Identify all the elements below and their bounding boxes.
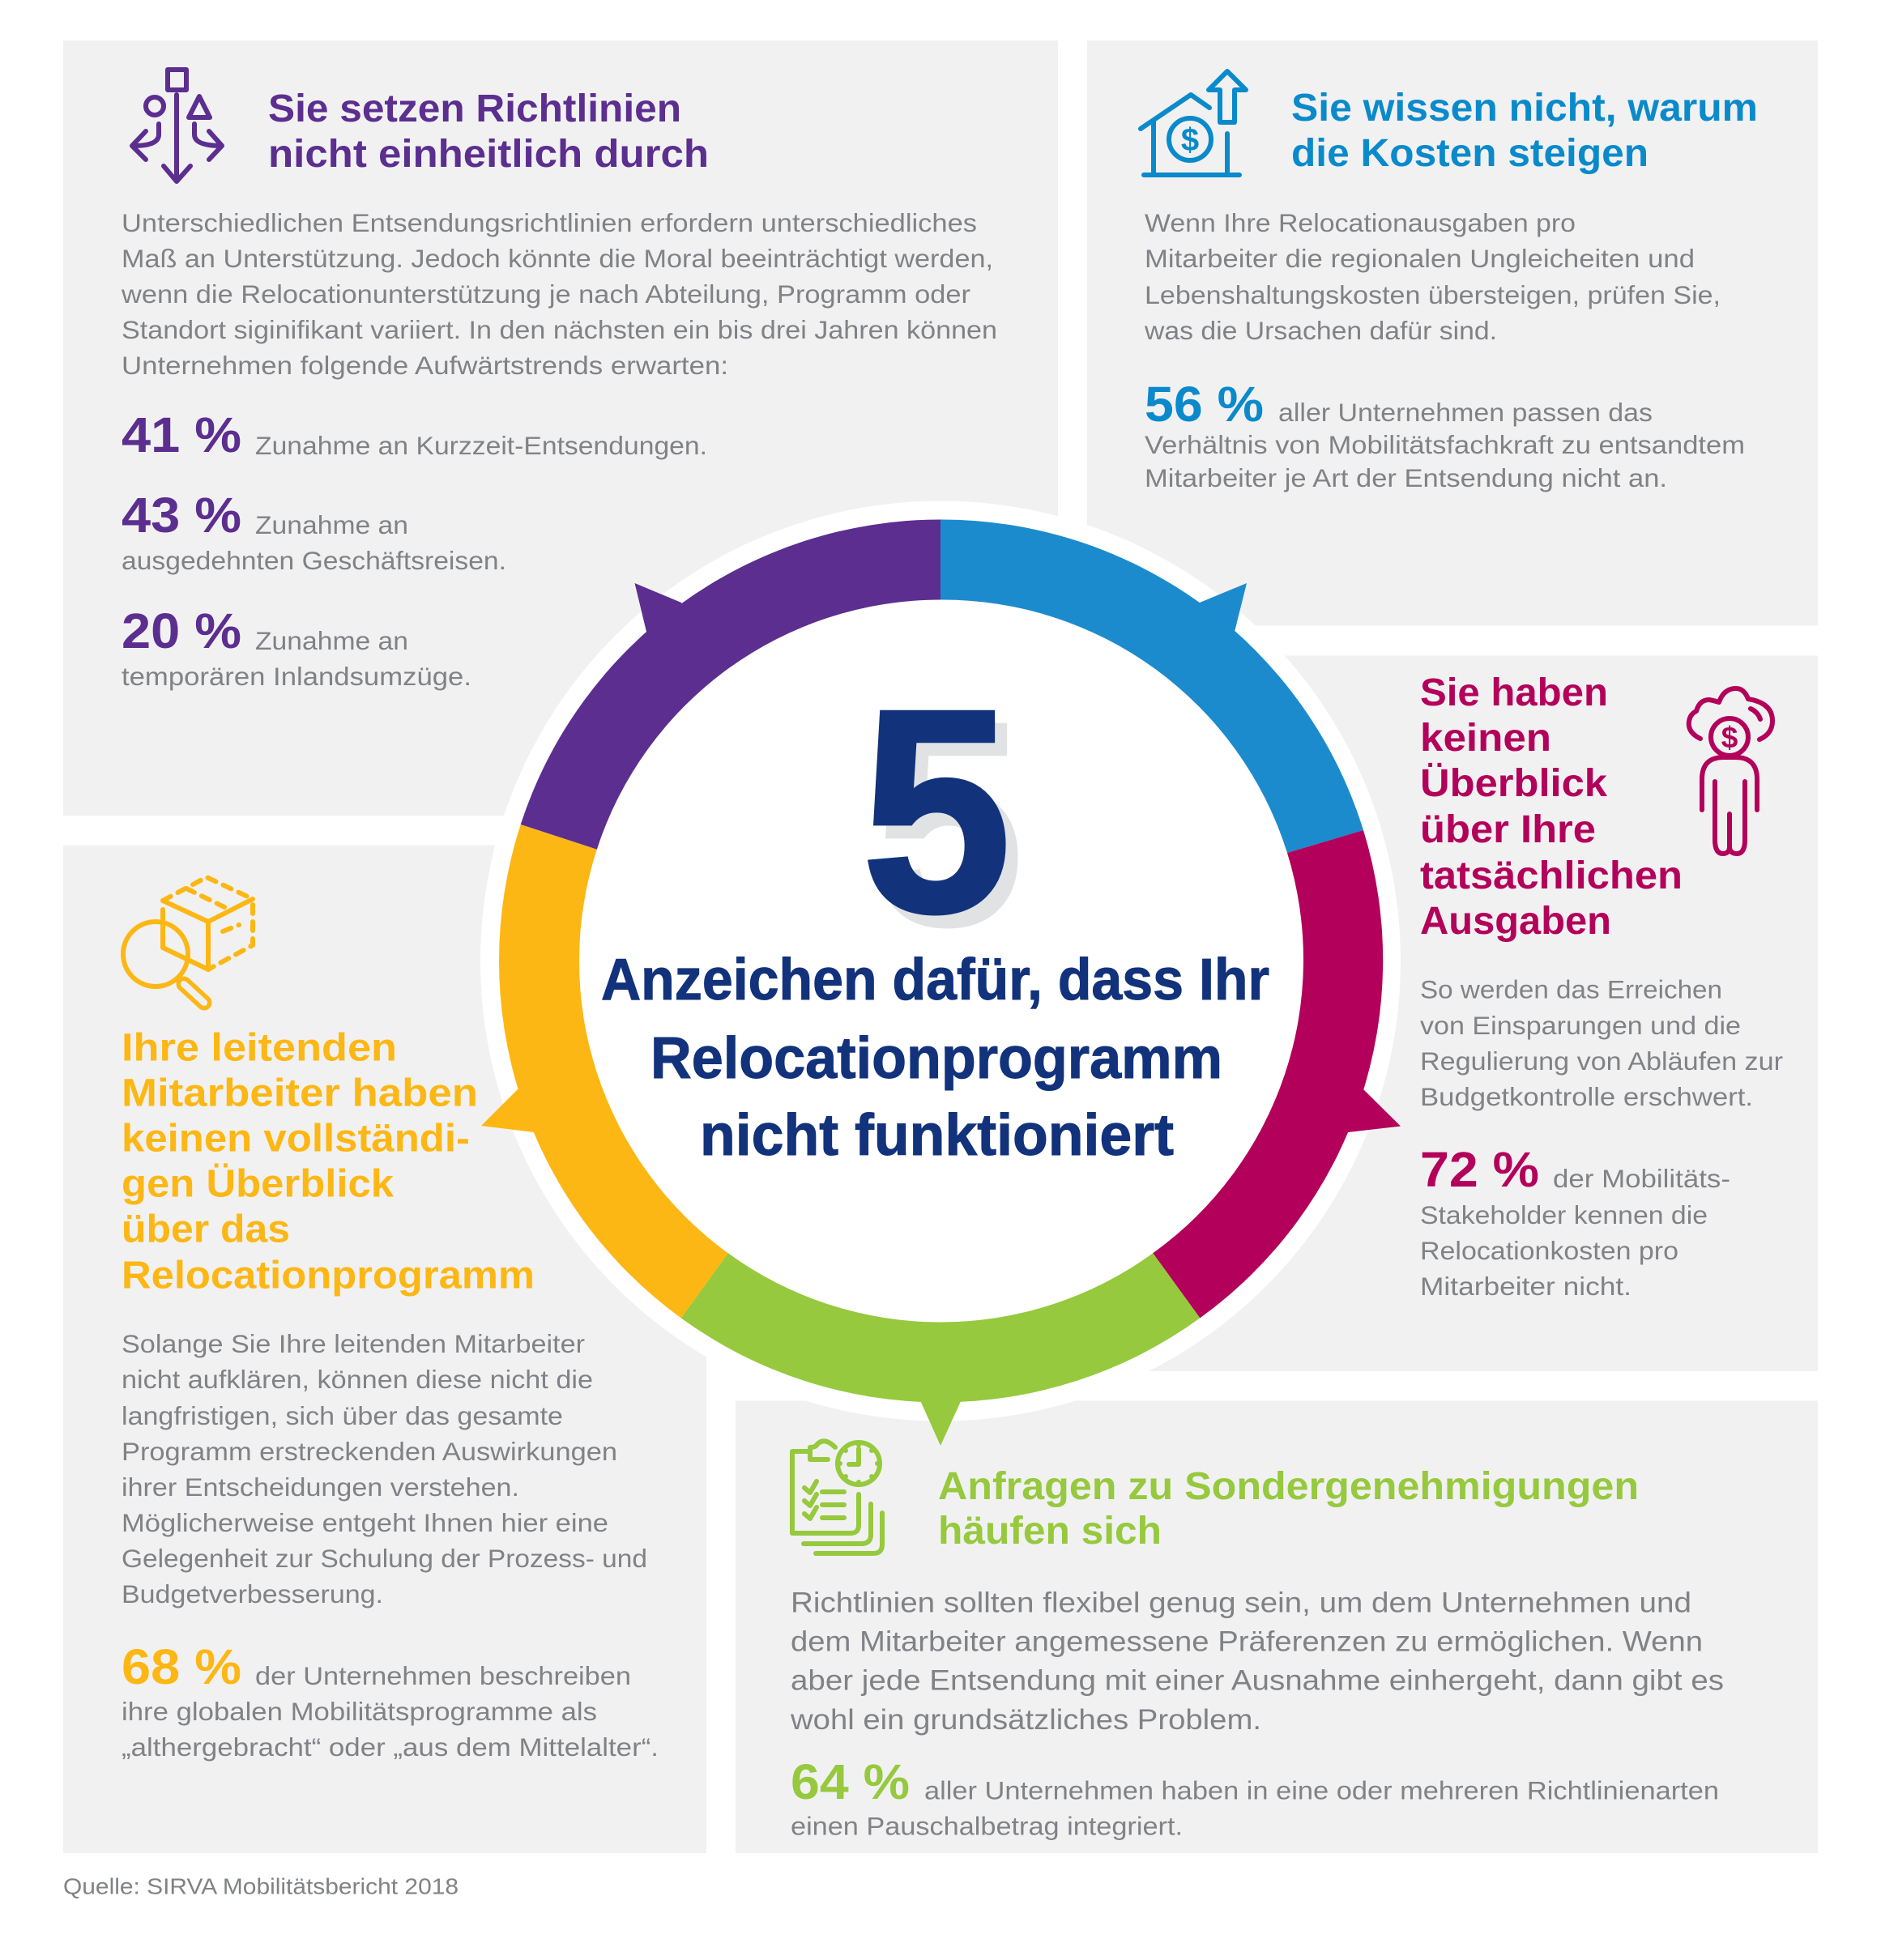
segment: blue (940, 519, 1363, 853)
panel: managers lack overview (63, 846, 706, 1853)
panel background (63, 846, 706, 1853)
body text: Unternehmen folgende Aufwärtstrends erwarten: (122, 351, 728, 380)
body text: So werden das Erreichen (1420, 975, 1722, 1004)
icon: house with dollar and arrow (1141, 71, 1246, 175)
stat: 20 percent: 20 % (122, 603, 241, 658)
stat: 20 percent: temporären Inlandsumzüge. (122, 662, 471, 691)
stat: 56 percent: aller Unternehmen passen das (1278, 398, 1653, 427)
heading: Ausgaben (1420, 900, 1611, 943)
stat: 43 percent (122, 488, 506, 575)
stat: 72 percent (1420, 1142, 1730, 1301)
stat: 20 percent (122, 603, 471, 691)
body text: Möglicherweise entgeht Ihnen hier eine (122, 1508, 608, 1537)
heading: nicht einheitlich durch (268, 133, 709, 176)
body text: wohl ein grundsätzliches Problem. (790, 1704, 1261, 1736)
panel: exception requests (736, 1401, 1818, 1853)
stat: 43 percent: ausgedehnten Geschäftsreisen. (122, 546, 506, 575)
heading: Relocationprogramm (122, 1254, 535, 1297)
panel: rising costs (1087, 40, 1818, 625)
body text: von Einsparungen und die (1420, 1011, 1741, 1040)
heading: Sie setzen Richtlinien (268, 87, 681, 130)
stat: 20 percent: Zunahme an (255, 626, 408, 655)
center number with shadow: 5 (861, 649, 1012, 973)
stat: 64 percent (791, 1754, 1719, 1840)
stat: 72 percent: 72 % (1420, 1142, 1539, 1197)
heading: keinen vollständi- (122, 1118, 470, 1160)
icon: branching arrows (132, 70, 222, 181)
panel: no overview of spending (1087, 656, 1818, 1371)
center title: nicht funktioniert (700, 1103, 1174, 1168)
stat: 64 percent: 64 % (791, 1754, 910, 1809)
stat: 68 percent: ihre globalen Mobilitätsprogramme als (122, 1697, 597, 1726)
icon: box with magnifier (123, 877, 253, 1003)
stat: 72 percent: Mitarbeiter nicht. (1420, 1272, 1631, 1301)
stat: 72 percent: Relocationkosten pro (1420, 1236, 1678, 1265)
body text: Mitarbeiter die regionalen Ungleicheiten und (1145, 244, 1695, 273)
stat: 41 percent: Zunahme an Kurzzeit-Entsendungen. (255, 431, 707, 460)
heading: Anfragen zu Sondergenehmigungen (938, 1465, 1639, 1508)
heading: keinen (1420, 717, 1551, 760)
segment: magenta (1153, 830, 1401, 1318)
stat: 64 percent: einen Pauschalbetrag integriert. (791, 1811, 1183, 1840)
heading: Sie wissen nicht, warum (1291, 87, 1758, 130)
body text: Unterschiedlichen Entsendungsrichtlinien erfordern unterschiedliches (122, 208, 977, 237)
stat: 41 percent: 41 % (122, 407, 241, 462)
icon: house with dollar and arrow: $ (1181, 122, 1199, 158)
heading: gen Überblick (122, 1163, 394, 1205)
stat: 41 percent (122, 407, 707, 462)
stat: 64 percent: aller Unternehmen haben in eine oder mehreren Richtlinienarten (924, 1775, 1719, 1804)
heading: häufen sich (938, 1510, 1162, 1553)
body text: Budgetverbesserung. (122, 1579, 383, 1608)
stat: 56 percent: 56 % (1145, 377, 1264, 432)
body text: Lebenshaltungskosten übersteigen, prüfen Sie, (1145, 280, 1721, 309)
center title: Anzeichen dafür, dass Ihr (601, 948, 1269, 1012)
stat: 68 percent: „althergebracht“ oder „aus dem Mittelalter“. (122, 1732, 659, 1762)
body text (1144, 208, 1721, 345)
body text: Standort siginifikant variiert. In den nächsten ein bis drei Jahren können (122, 315, 997, 344)
stat: 72 percent: Stakeholder kennen die (1420, 1200, 1708, 1229)
heading: über das (122, 1208, 290, 1251)
stat: 68 percent (122, 1639, 659, 1762)
body text (121, 208, 997, 380)
panel: inconsistent policies (63, 40, 1058, 816)
stat: 43 percent: 43 % (122, 488, 241, 543)
center title (601, 948, 1269, 1168)
segment: green (681, 1253, 1200, 1446)
heading: Ihre leitenden (122, 1027, 397, 1069)
icon: person with dollar head and cloud (1689, 688, 1772, 854)
heading: Sie haben (1420, 671, 1608, 714)
body text: langfristigen, sich über das gesamte (122, 1401, 563, 1430)
panel background (736, 1401, 1818, 1853)
icon: clipboard with clock (792, 1441, 882, 1553)
white halo (480, 501, 1401, 1421)
body text: Maß an Unterstützung. Jedoch könnte die Moral beeinträchtigt werden, (122, 244, 993, 273)
heading: über Ihre (1420, 808, 1596, 851)
body text: was die Ursachen dafür sind. (1144, 316, 1497, 345)
body text (1420, 975, 1783, 1111)
central ring (480, 501, 1401, 1446)
stat: 68 percent: 68 % (122, 1639, 241, 1694)
heading (938, 1465, 1639, 1553)
heading (1291, 87, 1758, 175)
heading: Mitarbeiter haben (122, 1072, 478, 1114)
stat: 56 percent: Verhältnis von Mobilitätsfachkraft zu entsandtem (1145, 430, 1745, 459)
panel background (63, 40, 1058, 816)
heading: die Kosten steigen (1291, 132, 1649, 175)
heading (122, 1027, 535, 1297)
body text: Solange Sie Ihre leitenden Mitarbeiter (122, 1329, 585, 1358)
body text: Richtlinien sollten flexibel genug sein, um dem Unternehmen und (791, 1587, 1691, 1618)
heading: Überblick (1420, 762, 1607, 805)
stat: 72 percent: der Mobilitäts- (1553, 1164, 1730, 1193)
body text: Budgetkontrolle erschwert. (1420, 1082, 1753, 1111)
panel background (1087, 656, 1818, 1371)
center title: Relocationprogramm (650, 1026, 1222, 1091)
heading (268, 87, 709, 176)
panel background (1087, 40, 1818, 625)
body text: nicht aufklären, können diese nicht die (122, 1365, 593, 1394)
stat: 56 percent (1145, 377, 1745, 492)
stat: 43 percent: Zunahme an (255, 510, 408, 539)
body text: dem Mitarbeiter angemessene Präferenzen zu ermöglichen. Wenn (791, 1626, 1703, 1657)
segment: yellow (481, 824, 728, 1318)
segment: purple (521, 520, 940, 850)
body text: ihrer Entscheidungen verstehen. (122, 1472, 519, 1502)
body text: wenn die Relocationunterstützung je nach Abteilung, Programm oder (121, 279, 970, 309)
body text: Wenn Ihre Relocationausgaben pro (1145, 208, 1576, 237)
body text (790, 1587, 1724, 1736)
body text: aber jede Entsendung mit einer Ausnahme einhergeht, dann gibt es (791, 1665, 1724, 1696)
heading: tatsächlichen (1420, 854, 1683, 897)
body text: Regulierung von Abläufen zur (1420, 1046, 1783, 1076)
source note: Quelle: SIRVA Mobilitätsbericht 2018 (63, 1874, 459, 1898)
icon: person with dollar head and cloud: $ (1721, 721, 1738, 754)
body text: Programm erstreckenden Auswirkungen (122, 1437, 617, 1466)
stat: 56 percent: Mitarbeiter je Art der Entsendung nicht an. (1145, 463, 1667, 492)
body text (122, 1329, 647, 1608)
heading (1420, 671, 1683, 943)
center number with shadow: 5 (873, 662, 1024, 986)
body text: Gelegenheit zur Schulung der Prozess- und (122, 1544, 647, 1573)
stat: 68 percent: der Unternehmen beschreiben (255, 1661, 631, 1690)
